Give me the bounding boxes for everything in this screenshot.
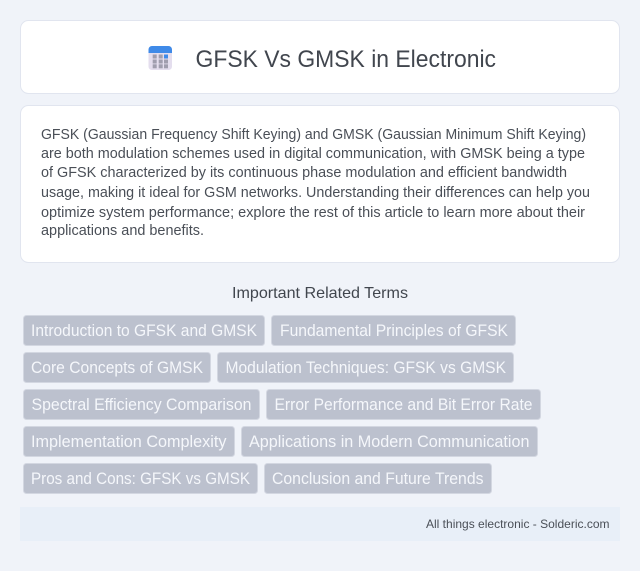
description text (41, 127, 590, 239)
tag: Implementation Complexity: Implementation Complexity (31, 432, 227, 451)
tag: Modulation Techniques: Modulation Techniques: GFSK vs GMSK (226, 358, 506, 377)
panel: description (20, 106, 620, 262)
tag: Introduction (24, 316, 264, 346)
tag: Spectral Efficiency: Spectral Efficiency Comparison (32, 395, 252, 414)
tag: Conclusion: Conclusion and Future Trends (272, 469, 484, 488)
tag: Error Performance: Error Performance and Bit Error Rate (274, 395, 532, 414)
tag: Fundamental Principles: Fundamental Principles of GFSK (280, 321, 508, 340)
tag: Error Performance (266, 390, 540, 420)
tag: Applications: Applications in Modern Communication (249, 432, 530, 451)
footer text: All things electronic - Solderic.com (426, 517, 610, 531)
description text: are both modulation schemes used in digital communication, with GMSK being a type (41, 146, 585, 162)
tag: Conclusion (264, 464, 492, 494)
description text: applications and benefits. (41, 223, 204, 239)
tag: Implementation Complexity (24, 426, 234, 456)
description text: optimize system performance; explore the rest of this article to learn more about their (41, 205, 585, 221)
description text: GFSK (Gaussian Frequency Shift Keying) and GMSK (Gaussian Minimum Shift Keying) (41, 127, 586, 143)
tag: Pros and Cons: Pros and Cons: GFSK vs GMSK (31, 469, 250, 488)
icon: calendar (148, 46, 172, 70)
tag: Core Concepts (24, 352, 210, 382)
heading: related terms: Important Related Terms (232, 285, 408, 302)
footer (20, 507, 620, 541)
title: GFSK Vs GMSK in Electronic (196, 46, 496, 73)
tag: Fundamental Principles (272, 316, 516, 346)
related terms tags (24, 316, 540, 494)
description text: of GFSK characterized by its continuous phase modulation and efficient bandwidth (41, 165, 567, 181)
tag: Pros and Cons (24, 464, 258, 494)
tag: Spectral Efficiency (24, 390, 260, 420)
tag: Applications (242, 426, 538, 456)
description text: usage, making it ideal for GSM networks. Understanding their differences can help you (41, 185, 590, 201)
tag: Core Concepts: Core Concepts of GMSK (31, 358, 203, 377)
tag: Modulation Techniques (218, 352, 514, 382)
panel: title card (20, 20, 620, 94)
tag: Introduction: Introduction to GFSK and GMSK (31, 321, 257, 340)
